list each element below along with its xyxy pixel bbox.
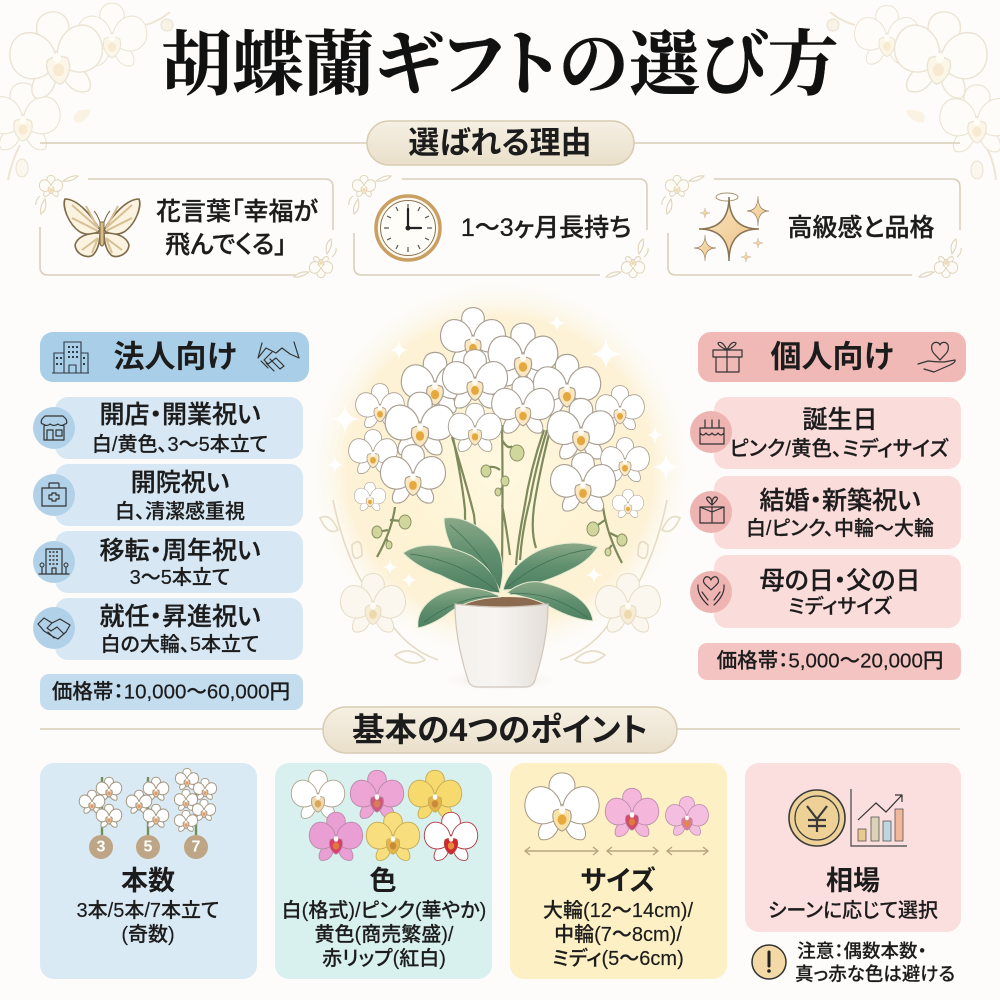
icon: colour flowers: [291, 770, 478, 860]
icon: gift: [713, 342, 742, 372]
text: (奇数): [121, 923, 175, 946]
icon: stems 3 5 7: 7: [192, 838, 201, 856]
buds: [372, 445, 627, 556]
panel: item 就任: [33, 598, 303, 660]
heading: 色: [370, 866, 396, 896]
section heading: reasons: 選ばれる理由: [408, 126, 592, 160]
panel: size: [510, 763, 727, 979]
panel: item 移転: [33, 531, 303, 593]
panel: item 誕生日: [690, 397, 961, 469]
icon: stems 3 5 7: [79, 768, 217, 859]
heading: 本数: [121, 866, 175, 896]
detail: 白/ピンク、中輪〜大輪: [746, 517, 934, 540]
text: 高級感と品格: [787, 214, 935, 242]
panel: reason 1: [36, 175, 336, 278]
icon: sparkles: [694, 193, 769, 262]
icon: gift: [700, 497, 724, 523]
flowers: [349, 308, 649, 518]
icon: stems 3 5 7: 5: [144, 838, 153, 856]
text: 3本/5本/7本立て: [77, 899, 219, 922]
glow: [305, 275, 695, 665]
panel: personal price: [698, 643, 961, 680]
panel: item 開店: [33, 397, 303, 459]
panel: market price: [745, 763, 961, 932]
icon: hands and heart: [698, 577, 724, 605]
panel: personal header: [698, 332, 966, 382]
background branches and pale flowers: [320, 500, 680, 663]
detail: 白の大輪、5本立て: [101, 633, 259, 656]
icon: three flower sizes: [525, 773, 708, 855]
title: 胡蝶蘭ギフトの選び方: [161, 27, 839, 105]
icon: handshake: [38, 618, 70, 639]
icon: cake: [700, 420, 724, 444]
section heading: four points: 基本の4つのポイント: [352, 712, 648, 748]
sparkles: [325, 313, 682, 589]
callout: warning: [752, 940, 955, 984]
title: 母の日・父の日: [760, 567, 920, 595]
panel: reason 2: [349, 175, 648, 278]
section heading: reasons: [40, 121, 960, 165]
icon: medical bag: [42, 483, 66, 506]
text: ミディ(5〜6cm): [552, 946, 684, 970]
section heading: four points: [40, 707, 960, 753]
decoration: corner orchids top right: [827, 6, 1000, 180]
icon: building with trees: [39, 549, 69, 574]
decoration: corner orchids top left: [0, 3, 173, 180]
soil: [458, 597, 546, 607]
price text: 価格帯：10,000〜60,000円: [52, 680, 290, 704]
warning text: 真っ赤な色は避ける: [795, 964, 955, 984]
panel: corporate price: [40, 674, 303, 710]
detail: 白、清潔感重視: [115, 499, 245, 523]
title: 開店・開業祝い: [99, 401, 261, 429]
text: 白(格式)/ピンク(華やか): [282, 899, 486, 922]
text: 飛んでくる」: [165, 231, 287, 259]
title: 移転・周年祝い: [99, 537, 261, 565]
text: 1〜3ヶ月長持ち: [461, 214, 631, 242]
icon: rising chart: [851, 789, 907, 846]
panel: item 結婚: [690, 476, 961, 549]
panel: item 母の日: [690, 555, 961, 628]
leaf veins: [410, 525, 592, 622]
text: 黄色(商売繁盛)/: [315, 923, 454, 946]
title: 誕生日: [802, 406, 878, 434]
icon: exclamation: [752, 945, 786, 979]
text: 花言葉「幸福が: [156, 198, 318, 226]
title: 開院祝い: [131, 469, 229, 497]
detail: 3〜5本立て: [130, 566, 230, 589]
pot shadow: [438, 668, 562, 692]
panel: reason 3: [662, 175, 961, 278]
panel: stem count: [40, 763, 257, 979]
panel: corporate header: [40, 332, 309, 382]
icon: hand with heart: [918, 342, 955, 372]
illustration: orchid plant: [305, 275, 695, 692]
icon: stems 3 5 7: 3: [97, 838, 106, 856]
panel: item 開院: [33, 464, 303, 526]
detail: ミディサイズ: [788, 594, 893, 618]
heading: 法人向け: [114, 340, 236, 374]
title: 結婚・新築祝い: [759, 487, 921, 515]
text: 赤リップ(紅白): [322, 947, 446, 970]
leaves: [403, 518, 598, 628]
text: シーンに応じて選択: [768, 899, 938, 922]
heading: 個人向け: [771, 340, 893, 374]
icon: shop: [41, 416, 67, 440]
icon: butterfly: [64, 199, 140, 257]
icon: handshake: [258, 342, 299, 371]
price text: 価格帯：5,000〜20,000円: [717, 650, 943, 672]
text: 大輪(12〜14cm)/: [543, 899, 693, 922]
heading: 相場: [826, 866, 880, 896]
stems: [377, 425, 622, 567]
detail: ピンク/黄色、ミディサイズ: [730, 436, 949, 460]
pot: [455, 604, 548, 687]
panel: colour: [275, 763, 492, 979]
icon: office buildings: [52, 342, 89, 373]
text: 中輪(7〜8cm)/: [554, 923, 682, 946]
detail: 白/黄色、3〜5本立て: [92, 433, 268, 456]
icon: clock: [376, 196, 440, 260]
warning text: 注意：偶数本数・: [797, 940, 927, 962]
icon: yen coin: [789, 790, 845, 846]
title: 就任・昇進祝い: [99, 603, 261, 631]
heading: サイズ: [580, 865, 656, 896]
